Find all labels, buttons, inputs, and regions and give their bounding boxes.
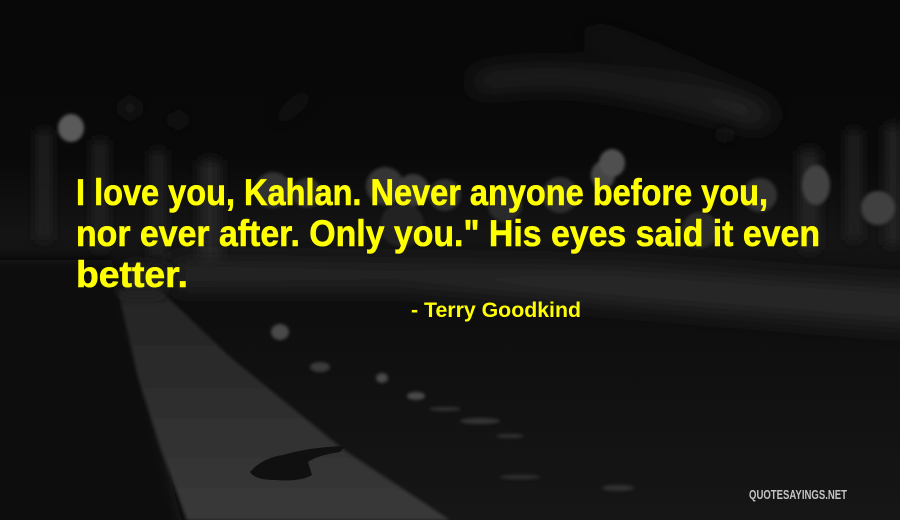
blurred horizon band (170, 262, 900, 330)
quote text (76, 172, 820, 295)
blurred vertical lights (38, 98, 900, 260)
road stripe (118, 290, 450, 520)
quote text: I love you, Kahlan. Never anyone before you, (76, 172, 768, 213)
watermark: QUOTESAYINGS.NET (749, 487, 847, 502)
blurred overhead streaks (275, 36, 770, 122)
road reflections (271, 324, 634, 491)
bokeh circles (58, 114, 895, 248)
tar patch on stripe (250, 446, 345, 480)
attribution: - Terry Goodkind (411, 299, 581, 322)
quote text: better. (76, 254, 188, 295)
quote text: nor ever after. Only you." His eyes said it even (76, 213, 820, 254)
